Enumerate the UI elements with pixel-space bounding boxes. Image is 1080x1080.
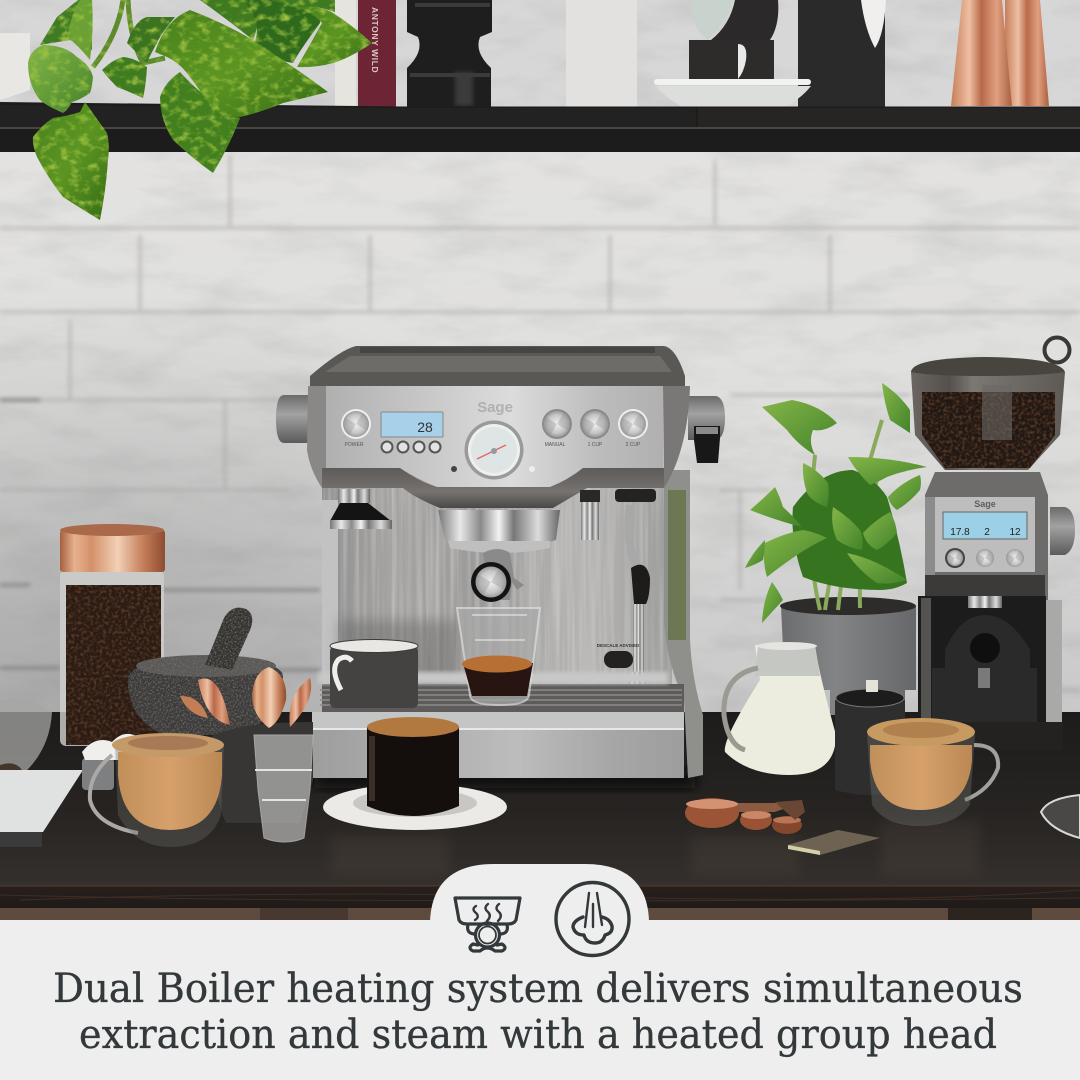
base tray (312, 712, 684, 778)
cup on grate (330, 640, 418, 708)
copper spoons (180, 667, 311, 728)
control panel (326, 386, 663, 487)
copper cones (951, 0, 1049, 106)
grinder LCD: 12 (1009, 527, 1021, 538)
espresso machine (276, 346, 725, 788)
plant pot (781, 606, 916, 715)
group head (438, 510, 560, 553)
panel labels: POWER (345, 442, 364, 448)
top lid (310, 346, 685, 386)
descale tag (597, 643, 640, 668)
caption heading (53, 966, 1023, 1058)
mortar and pestle (128, 608, 283, 735)
white planter cup (0, 33, 30, 100)
grinder LCD: 17.8 (950, 527, 970, 538)
descale tag: DESCALE ADVISED (597, 643, 640, 648)
icon: dual boiler (455, 898, 520, 951)
LCD display (381, 412, 443, 437)
table top (0, 712, 1080, 920)
caption heading: extraction and steam with a heated group head (79, 1012, 997, 1058)
panel labels (345, 442, 641, 448)
status LEDs (451, 466, 535, 472)
dark cup with saucer (654, 40, 811, 108)
back body (322, 470, 703, 778)
gold card (788, 830, 880, 855)
right knobs (542, 409, 648, 439)
hot water outlet (580, 490, 600, 540)
black turned vase (407, 0, 492, 107)
left side knob (276, 395, 308, 443)
hopper (911, 338, 1070, 470)
bottom caption panel (0, 864, 1080, 1080)
glass bowl and scale (0, 699, 83, 847)
caption heading: Dual Boiler heating system delivers simultaneous (53, 966, 1023, 1012)
side panels (307, 386, 326, 488)
LCD display: 28 (417, 419, 433, 435)
hanging pothos plant (28, 0, 372, 220)
lower dark band (322, 468, 664, 508)
pale plate and black bowl (692, 0, 778, 40)
sugar pot (82, 734, 140, 790)
potted plant (745, 383, 927, 715)
panel labels: MANUAL (545, 442, 566, 448)
tamper (330, 489, 392, 529)
black tin (835, 680, 905, 795)
grinder lower body (918, 596, 1063, 750)
menu buttons (382, 442, 440, 452)
milk jug (724, 642, 836, 775)
icon: steam circle (556, 882, 629, 956)
portafilter (471, 549, 524, 602)
machine shadow (315, 770, 695, 788)
plant leaves (745, 383, 927, 623)
black coffee on saucer (323, 717, 507, 830)
copper measuring spoons (685, 798, 805, 834)
black tall vase (798, 0, 886, 108)
shot glasses (254, 735, 313, 842)
drip tray grate (318, 672, 684, 714)
panel labels: 1 CUP (588, 442, 603, 448)
dark vase with copper spoons (180, 667, 313, 823)
pressure gauge (464, 420, 524, 480)
plate at right edge (1041, 795, 1080, 838)
coffee jar (60, 524, 165, 746)
grinder upper body: Sage (974, 499, 996, 509)
panel labels: 2 CUP (626, 442, 641, 448)
steam wand (615, 489, 656, 694)
latte glass left (90, 733, 224, 847)
stems (811, 420, 882, 610)
white cylinder vase (566, 0, 637, 108)
grinder LCD: 2 (984, 527, 990, 538)
grinder LCD (943, 512, 1027, 539)
logo: Sage (477, 399, 513, 416)
grinder knobs (945, 548, 1024, 568)
background: white painted brick wall (0, 0, 1080, 720)
shelf objects (0, 0, 1049, 108)
book: red Antony Wild: ANTONY WILD (370, 7, 380, 73)
book: red Antony Wild (358, 0, 396, 107)
book: white spine (335, 0, 356, 106)
power knob (341, 409, 371, 439)
grinder upper body (925, 472, 1075, 600)
latte glass right (867, 718, 998, 826)
shelf (0, 102, 1080, 152)
espresso glass (457, 608, 540, 705)
right side knob (688, 396, 725, 463)
coffee grinder (911, 338, 1075, 750)
